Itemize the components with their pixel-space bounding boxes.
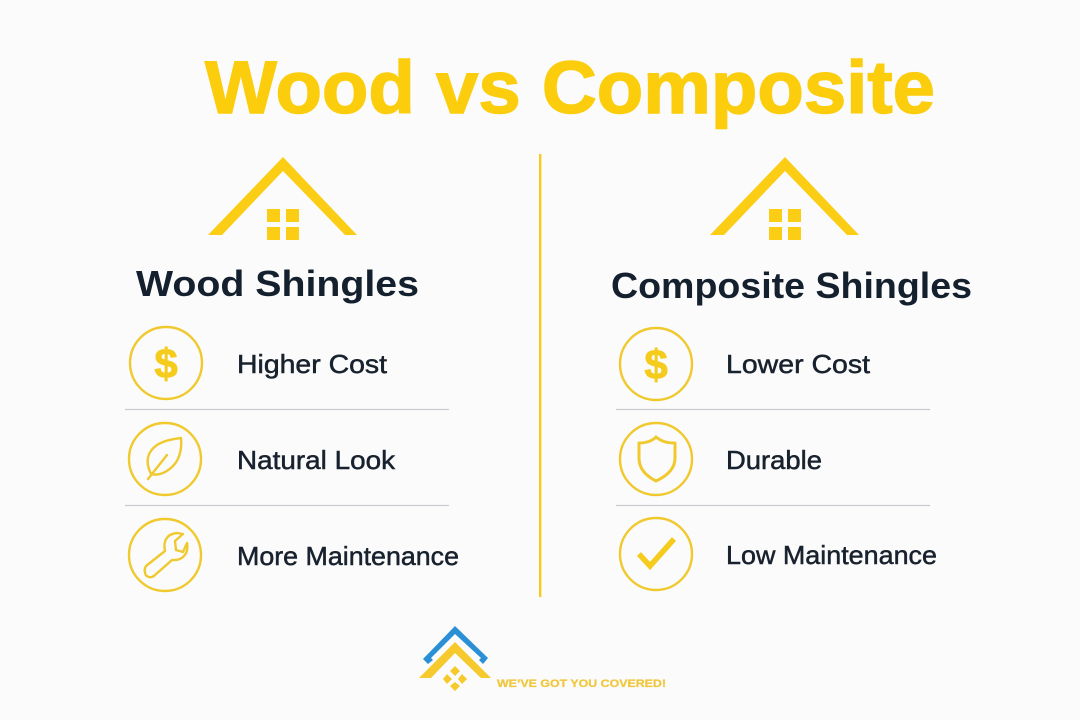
row: higher cost bbox=[130, 327, 388, 399]
icon: house roof bbox=[710, 157, 859, 240]
logo bbox=[419, 626, 666, 691]
heading: composite shingles: Composite Shingles bbox=[611, 265, 972, 306]
row: more maintenance: More Maintenance bbox=[237, 541, 459, 571]
tagline: WE’VE GOT YOU COVERED! bbox=[497, 678, 666, 690]
row: higher cost: Higher Cost bbox=[237, 349, 388, 379]
row: lower cost bbox=[620, 328, 871, 400]
center divider bbox=[539, 154, 541, 597]
icon: diamond window bbox=[443, 666, 467, 691]
row: natural look bbox=[129, 423, 396, 495]
row: durable bbox=[620, 423, 822, 495]
row: lower cost: $ bbox=[644, 341, 668, 388]
row: durable: Durable bbox=[726, 445, 822, 475]
row: more maintenance bbox=[129, 519, 459, 591]
row: higher cost: $ bbox=[154, 340, 178, 387]
row: low maintenance bbox=[620, 518, 937, 590]
row: low maintenance: Low Maintenance bbox=[726, 540, 937, 570]
title: Wood vs Composite bbox=[205, 46, 935, 129]
icon: yellow roof bbox=[419, 642, 491, 678]
row: natural look: Natural Look bbox=[237, 445, 396, 475]
icon: blue roof bbox=[423, 626, 488, 664]
row: lower cost: Lower Cost bbox=[726, 349, 871, 379]
panel: composite shingles bbox=[611, 157, 972, 590]
icon: house roof bbox=[208, 157, 357, 240]
panel: wood shingles bbox=[125, 157, 459, 591]
heading: wood shingles: Wood Shingles bbox=[136, 263, 419, 304]
